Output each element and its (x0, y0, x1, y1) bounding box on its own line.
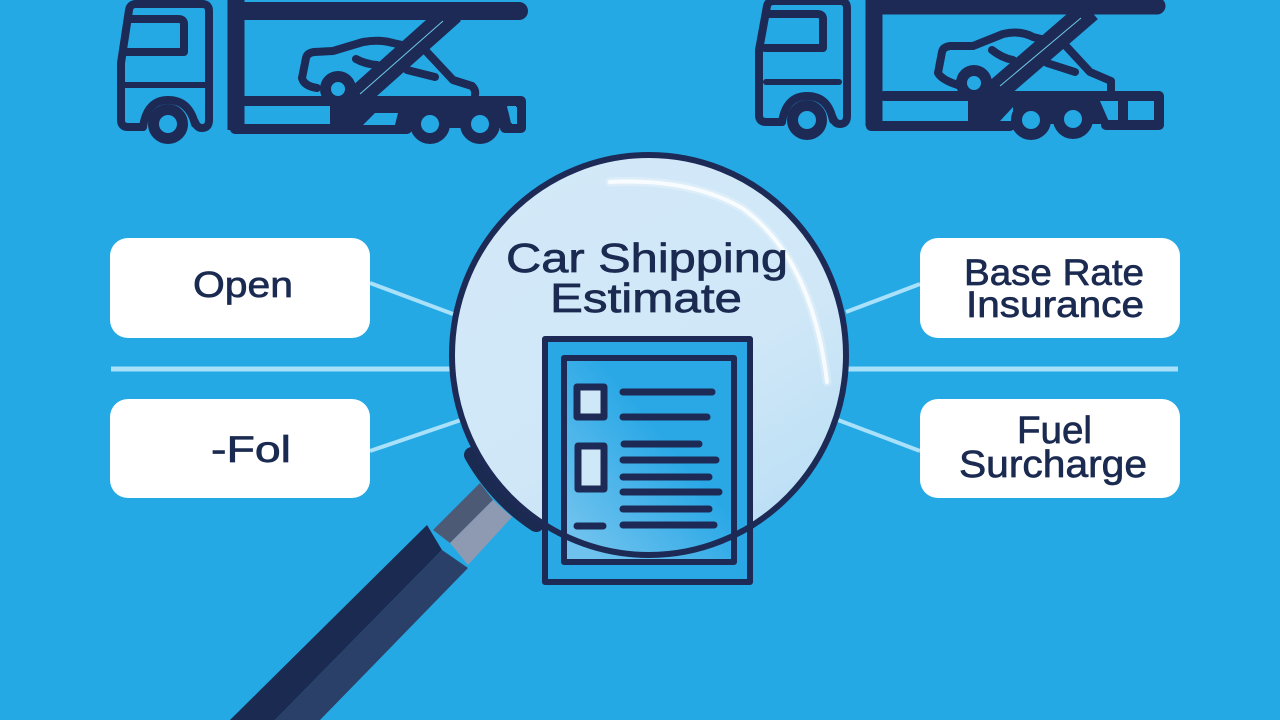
checkbox 2 (578, 446, 604, 489)
label box: base rate and insurance (920, 238, 1180, 338)
label box: Open: Open (193, 264, 293, 305)
heading: Car Shipping (506, 235, 788, 281)
heading (506, 235, 788, 321)
label box: garbled fuel (110, 399, 370, 498)
checkbox 1 (577, 387, 604, 417)
connector lines (111, 283, 1178, 451)
label box: fuel surcharge (920, 399, 1180, 498)
lens highlight (610, 182, 827, 382)
label box: fuel surcharge: Surcharge (959, 444, 1147, 486)
text lines (577, 392, 719, 526)
lens rim (452, 155, 846, 555)
lens (452, 155, 846, 555)
label box: Open (110, 238, 370, 338)
label box: garbled fuel: -Fol (211, 429, 291, 470)
document icon (545, 339, 750, 582)
icon: left car carrier truck (121, 0, 521, 138)
magnifying glass handle (230, 455, 536, 720)
label box: base rate and insurance: Insurance (966, 284, 1144, 325)
heading: Estimate (550, 275, 742, 321)
label box: base rate and insurance: Base Rate (964, 252, 1144, 293)
label box: fuel surcharge: Fuel (1017, 410, 1092, 452)
icon: right car carrier truck (759, 0, 1159, 134)
